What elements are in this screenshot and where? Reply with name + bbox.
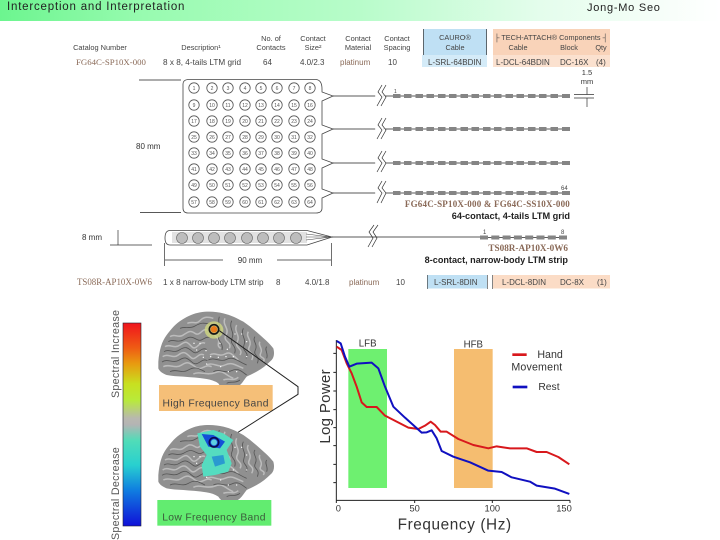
64-contact grid panel: 5 — [260, 86, 263, 92]
64-contact grid panel: 55 — [291, 183, 297, 189]
strip spec row: 8 — [276, 278, 281, 287]
strip spec row: L-DCL-8DIN — [502, 278, 546, 287]
Cauro cable header box: Cable — [445, 43, 465, 52]
64-contact grid panel: 24 — [307, 119, 313, 125]
label: high frequency band — [159, 385, 273, 411]
64-contact grid panel: 9 — [193, 103, 196, 109]
spec table header: Contact — [345, 34, 371, 43]
64-contact grid panel: 7 — [293, 86, 296, 92]
header bar — [0, 0, 720, 21]
Cauro cable header box — [423, 29, 487, 55]
64-contact grid panel: 11 — [225, 103, 231, 109]
64-contact grid panel: 12 — [242, 103, 248, 109]
64-contact grid panel: 31 — [291, 135, 297, 141]
grid spec row: 4.0/2.3 — [300, 58, 325, 67]
Tech-Attach header box: Qty — [595, 43, 607, 52]
64-contact grid panel: 29 — [258, 135, 264, 141]
strip spec row: 4.0/1.8 — [305, 278, 330, 287]
64-contact grid panel: 28 — [242, 135, 248, 141]
64-contact grid panel: 52 — [242, 183, 248, 189]
64-contact grid panel: 17 — [191, 119, 197, 125]
64-contact grid panel: 18 — [209, 119, 215, 125]
grid spec row: 10 — [388, 58, 397, 67]
64-contact grid panel: 54 — [274, 183, 280, 189]
64-contact grid panel: 40 — [307, 151, 313, 157]
64-contact grid panel: 47 — [291, 167, 297, 173]
64-contact grid panel: 46 — [274, 167, 280, 173]
strip tail contacts: 1 — [483, 230, 487, 236]
brain: high frequency — [158, 312, 274, 390]
HFB band: HFB — [464, 340, 483, 351]
64-contact grid panel: 32 — [307, 135, 313, 141]
LFB band: LFB — [359, 339, 377, 350]
strip spec row: 10 — [396, 278, 405, 287]
64-contact grid panel: 10 — [209, 103, 215, 109]
64-contact grid panel: 23 — [291, 119, 297, 125]
Tech-Attach header box: Cable — [508, 43, 528, 52]
spec table header: Contact — [300, 34, 326, 43]
64-contact grid panel: 13 — [258, 103, 264, 109]
strip tail contacts: 8 — [561, 230, 565, 236]
dimension: 1.5 mm: 1.5 — [582, 68, 592, 77]
axis labels: 50 — [409, 504, 420, 514]
64-contact grid panel: 45 — [258, 167, 264, 173]
64-contact grid panel: 30 — [274, 135, 280, 141]
grid spec row: platinum — [340, 58, 371, 67]
grid tails with contacts: 64 — [561, 186, 568, 192]
64-contact grid panel: 22 — [274, 119, 280, 125]
axis labels: 100 — [485, 504, 500, 514]
64-contact grid panel: 14 — [274, 103, 280, 109]
64-contact grid panel: 53 — [258, 183, 264, 189]
64-contact grid panel: 36 — [242, 151, 248, 157]
64-contact grid panel: 25 — [191, 135, 197, 141]
grid caption: FG64C-SP10X-000 & FG64C-SS10X-000 — [405, 199, 570, 209]
HFB band — [454, 340, 493, 488]
grid spec row: L-DCL-64BDIN — [496, 58, 550, 67]
grid spec row: FG64C-SP10X-000 — [76, 57, 146, 67]
64-contact grid panel: 38 — [274, 151, 280, 157]
64-contact grid panel: 60 — [242, 200, 248, 206]
grid spec row: (4) — [596, 58, 606, 67]
64-contact grid panel: 64 — [307, 200, 313, 206]
axis labels: 150 — [556, 504, 572, 514]
64-contact grid panel: 6 — [276, 86, 279, 92]
64-contact grid panel: 4 — [244, 86, 247, 92]
strip spec row: DC-8X — [560, 278, 585, 287]
author: Jong-Mo Seo — [587, 2, 661, 14]
64-contact grid panel: 27 — [225, 135, 231, 141]
dimension: 90 mm — [164, 243, 332, 266]
label: low frequency band — [157, 500, 271, 526]
rest curve — [337, 341, 569, 494]
strip tail contacts — [480, 230, 567, 240]
64-contact grid panel: 44 — [242, 167, 248, 173]
strip spec row: L-SRL-8DIN — [434, 278, 478, 287]
8-contact strip — [165, 230, 480, 245]
strip spec row — [77, 275, 610, 289]
power spectrum chart — [317, 339, 572, 534]
64-contact grid panel: 42 — [209, 167, 215, 173]
strip spec row: 1 x 8 narrow-body LTM strip — [163, 278, 264, 287]
dimension: 8 mm: 8 mm — [82, 233, 102, 242]
brain panel — [157, 312, 298, 526]
axis labels: 0 — [336, 504, 341, 514]
hand movement curve — [337, 347, 569, 464]
grid tails with contacts — [333, 89, 570, 195]
dimension: 1.5 mm: mm — [581, 77, 593, 86]
colour bar: Spectral Decrease — [110, 447, 122, 540]
64-contact grid panel: 26 — [209, 135, 215, 141]
axis labels: Log Power — [317, 369, 334, 444]
64-contact grid panel — [183, 80, 333, 213]
grid tails with contacts: 1 — [394, 89, 397, 95]
64-contact grid panel: 43 — [225, 167, 231, 173]
grid spec row: 8 x 8, 4-tails LTM grid — [163, 58, 242, 67]
64-contact grid panel: 16 — [307, 103, 313, 109]
dimension: 8 mm — [82, 230, 152, 245]
dimension: 1.5 mm — [574, 68, 594, 107]
LFB band — [348, 339, 387, 488]
64-contact grid panel: 51 — [225, 183, 231, 189]
64-contact grid panel: 21 — [258, 119, 264, 125]
64-contact grid panel: 56 — [307, 183, 313, 189]
break marks — [367, 85, 390, 247]
64-contact grid panel: 63 — [291, 200, 297, 206]
64-contact grid panel: 58 — [209, 200, 215, 206]
legend: Movement — [511, 361, 562, 373]
legend — [511, 349, 563, 393]
64-contact grid panel: 34 — [209, 151, 215, 157]
axis labels — [317, 369, 572, 534]
64-contact grid panel: 20 — [242, 119, 248, 125]
spec table header: Material — [345, 43, 371, 52]
64-contact grid panel: 49 — [191, 183, 197, 189]
grid spec row: L-SRL-64BDIN — [428, 58, 482, 67]
64-contact grid panel: 8 — [309, 86, 312, 92]
axes — [333, 340, 570, 503]
grid caption — [405, 199, 570, 221]
Tech-Attach header box: Block — [560, 43, 578, 52]
strip caption: TS08R-AP10X-0W6 — [488, 243, 568, 253]
legend: Hand — [537, 349, 563, 361]
strip spec row: platinum — [349, 278, 380, 287]
64-contact grid panel: 62 — [274, 200, 280, 206]
dimension: 80 mm: 80 mm — [136, 142, 161, 151]
grid spec row — [76, 55, 610, 67]
64-contact grid panel: 33 — [191, 151, 197, 157]
64-contact grid panel: 1 — [193, 86, 196, 92]
64-contact grid panel: 2 — [211, 86, 214, 92]
64-contact grid panel: 59 — [225, 200, 231, 206]
brain: low frequency — [158, 425, 274, 503]
colour bar — [110, 310, 141, 540]
64-contact grid panel: 35 — [225, 151, 231, 157]
axis labels: Frequency (Hz) — [398, 517, 512, 534]
strip caption — [425, 243, 568, 265]
64-contact grid panel: 48 — [307, 167, 313, 173]
strip caption: 8-contact, narrow-body LTM strip — [425, 255, 568, 265]
spec table header: Contact — [384, 34, 410, 43]
label: low frequency band: Low Frequency Band — [162, 513, 266, 524]
dimension: 80 mm — [136, 80, 181, 212]
label: high frequency band: High Frequency Band — [163, 398, 269, 409]
spec table header — [73, 34, 410, 52]
spec table header: Description¹ — [181, 43, 221, 52]
64-contact grid panel: 50 — [209, 183, 215, 189]
Tech-Attach header box — [493, 29, 610, 55]
64-contact grid panel: 41 — [191, 167, 197, 173]
64-contact grid panel: 3 — [227, 86, 230, 92]
64-contact grid panel: 15 — [291, 103, 297, 109]
64-contact grid panel: 39 — [291, 151, 297, 157]
64-contact grid panel: 19 — [225, 119, 231, 125]
spec table header: Catalog Number — [73, 43, 127, 52]
legend: Rest — [538, 382, 560, 393]
spec table header: Size² — [305, 43, 322, 52]
title: Interception and Interpretation — [7, 1, 185, 13]
64-contact grid panel: 61 — [258, 200, 264, 206]
Cauro cable header box: CAURO® — [439, 33, 471, 42]
spec table header: Contacts — [256, 43, 286, 52]
spec table header: No. of — [261, 34, 282, 43]
spec table header: Spacing — [384, 43, 410, 52]
colour bar: Spectral Increase — [110, 310, 122, 398]
dimension: 90 mm: 90 mm — [238, 256, 263, 265]
strip spec row: (1) — [597, 278, 607, 287]
grid caption: 64-contact, 4-tails LTM grid — [452, 211, 570, 221]
64-contact grid panel: 37 — [258, 151, 264, 157]
64-contact grid panel: 57 — [191, 200, 197, 206]
grid spec row: DC-16X — [560, 58, 589, 67]
grid spec row: 64 — [263, 58, 272, 67]
connector lines — [219, 331, 298, 443]
strip spec row: TS08R-AP10X-0W6 — [77, 277, 153, 287]
Tech-Attach header box: ├ TECH-ATTACH® Components ┤ — [494, 33, 608, 43]
